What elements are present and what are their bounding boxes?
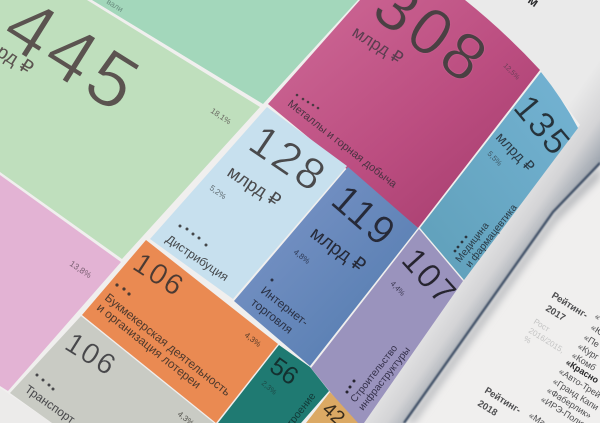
- text: right page table: 2018: [475, 398, 499, 419]
- heading rating 2017: Рейтинг-: [549, 290, 590, 321]
- panel: pink sector: [0, 175, 121, 391]
- marker dots: [346, 380, 356, 394]
- label: торговля: [248, 295, 295, 337]
- text: right page table: «Гранд Капи: [551, 376, 600, 412]
- text: right page table: [475, 290, 600, 423]
- percent: 4,4%: [389, 279, 407, 298]
- label: инфраструктуры: [356, 345, 413, 413]
- value 106: 106: [127, 247, 190, 303]
- value 107: 107: [394, 241, 464, 313]
- bottom left page: [0, 388, 52, 423]
- panel: orange betting sector: [82, 240, 278, 423]
- label: и фармацевтика: [463, 202, 520, 270]
- text: right page table: «Красно: [564, 357, 600, 386]
- label: Букмекерская деятельность: [102, 290, 233, 399]
- marker dots: [115, 283, 131, 296]
- unit: млрд ₽: [492, 130, 537, 175]
- percent: 5,2%: [208, 183, 228, 201]
- heading rating 2018: Рейтинг-: [482, 385, 523, 416]
- label: Металлы и горная добыча: [285, 98, 400, 191]
- marker dots: [178, 224, 208, 246]
- unit: млрд ₽: [306, 223, 369, 277]
- panel: light blue distribution sector: [150, 107, 347, 299]
- label: Дистрибуция: [163, 232, 231, 284]
- percent: 4,3%: [243, 330, 263, 349]
- text: right page table: 2017: [543, 303, 567, 324]
- text: right page table: «Комб: [570, 350, 598, 373]
- percent: 2,3%: [260, 379, 279, 397]
- percent: 13,8%: [68, 258, 94, 280]
- panel: teal engineering sector: [218, 345, 329, 423]
- gutter dark line: [404, 163, 600, 423]
- value 106: 106: [59, 327, 122, 383]
- label: и организация лотереи: [94, 300, 204, 391]
- label: Строительство: [349, 343, 400, 405]
- text: right page table: %: [522, 334, 533, 345]
- percent: 5,5%: [486, 149, 504, 168]
- text: right page table: «Фаберлик»: [545, 385, 593, 421]
- panel: steel blue medicine sector: [420, 72, 580, 280]
- text: right page table: 2016/2015,: [527, 326, 566, 355]
- growth column: Рост: [532, 317, 551, 334]
- panel: gold sector: [306, 392, 358, 423]
- value 119: 119: [323, 177, 405, 256]
- marker dot: [270, 278, 274, 282]
- book gutter shadow: [406, 165, 600, 423]
- value 128: 128: [240, 116, 336, 202]
- value 56: 56: [265, 352, 303, 391]
- unit: млрд ₽: [349, 22, 407, 68]
- panel: periwinkle internet trade sector: [234, 167, 418, 366]
- panel: grey transport sector: [10, 316, 214, 423]
- panel: 445 pale green sector: [0, 0, 260, 259]
- label: Медицина: [454, 220, 492, 265]
- unit: млрд ₽: [224, 162, 285, 211]
- left page margin: [350, 0, 600, 423]
- marker dots: [296, 94, 319, 109]
- percent: 4,8%: [292, 247, 312, 266]
- value 135: 135: [506, 87, 580, 164]
- label: Интернет-: [258, 283, 311, 329]
- percent: 18,1%: [209, 106, 233, 126]
- panel: mint sector: [92, 0, 358, 104]
- marker dots: [36, 374, 54, 390]
- percent: 12,5%: [502, 62, 521, 81]
- marker dots: [454, 236, 467, 252]
- text: right page table: «Кург: [576, 341, 600, 362]
- panel: magenta metals sector: [268, 0, 540, 228]
- panel: purple infrastructure sector: [311, 229, 464, 423]
